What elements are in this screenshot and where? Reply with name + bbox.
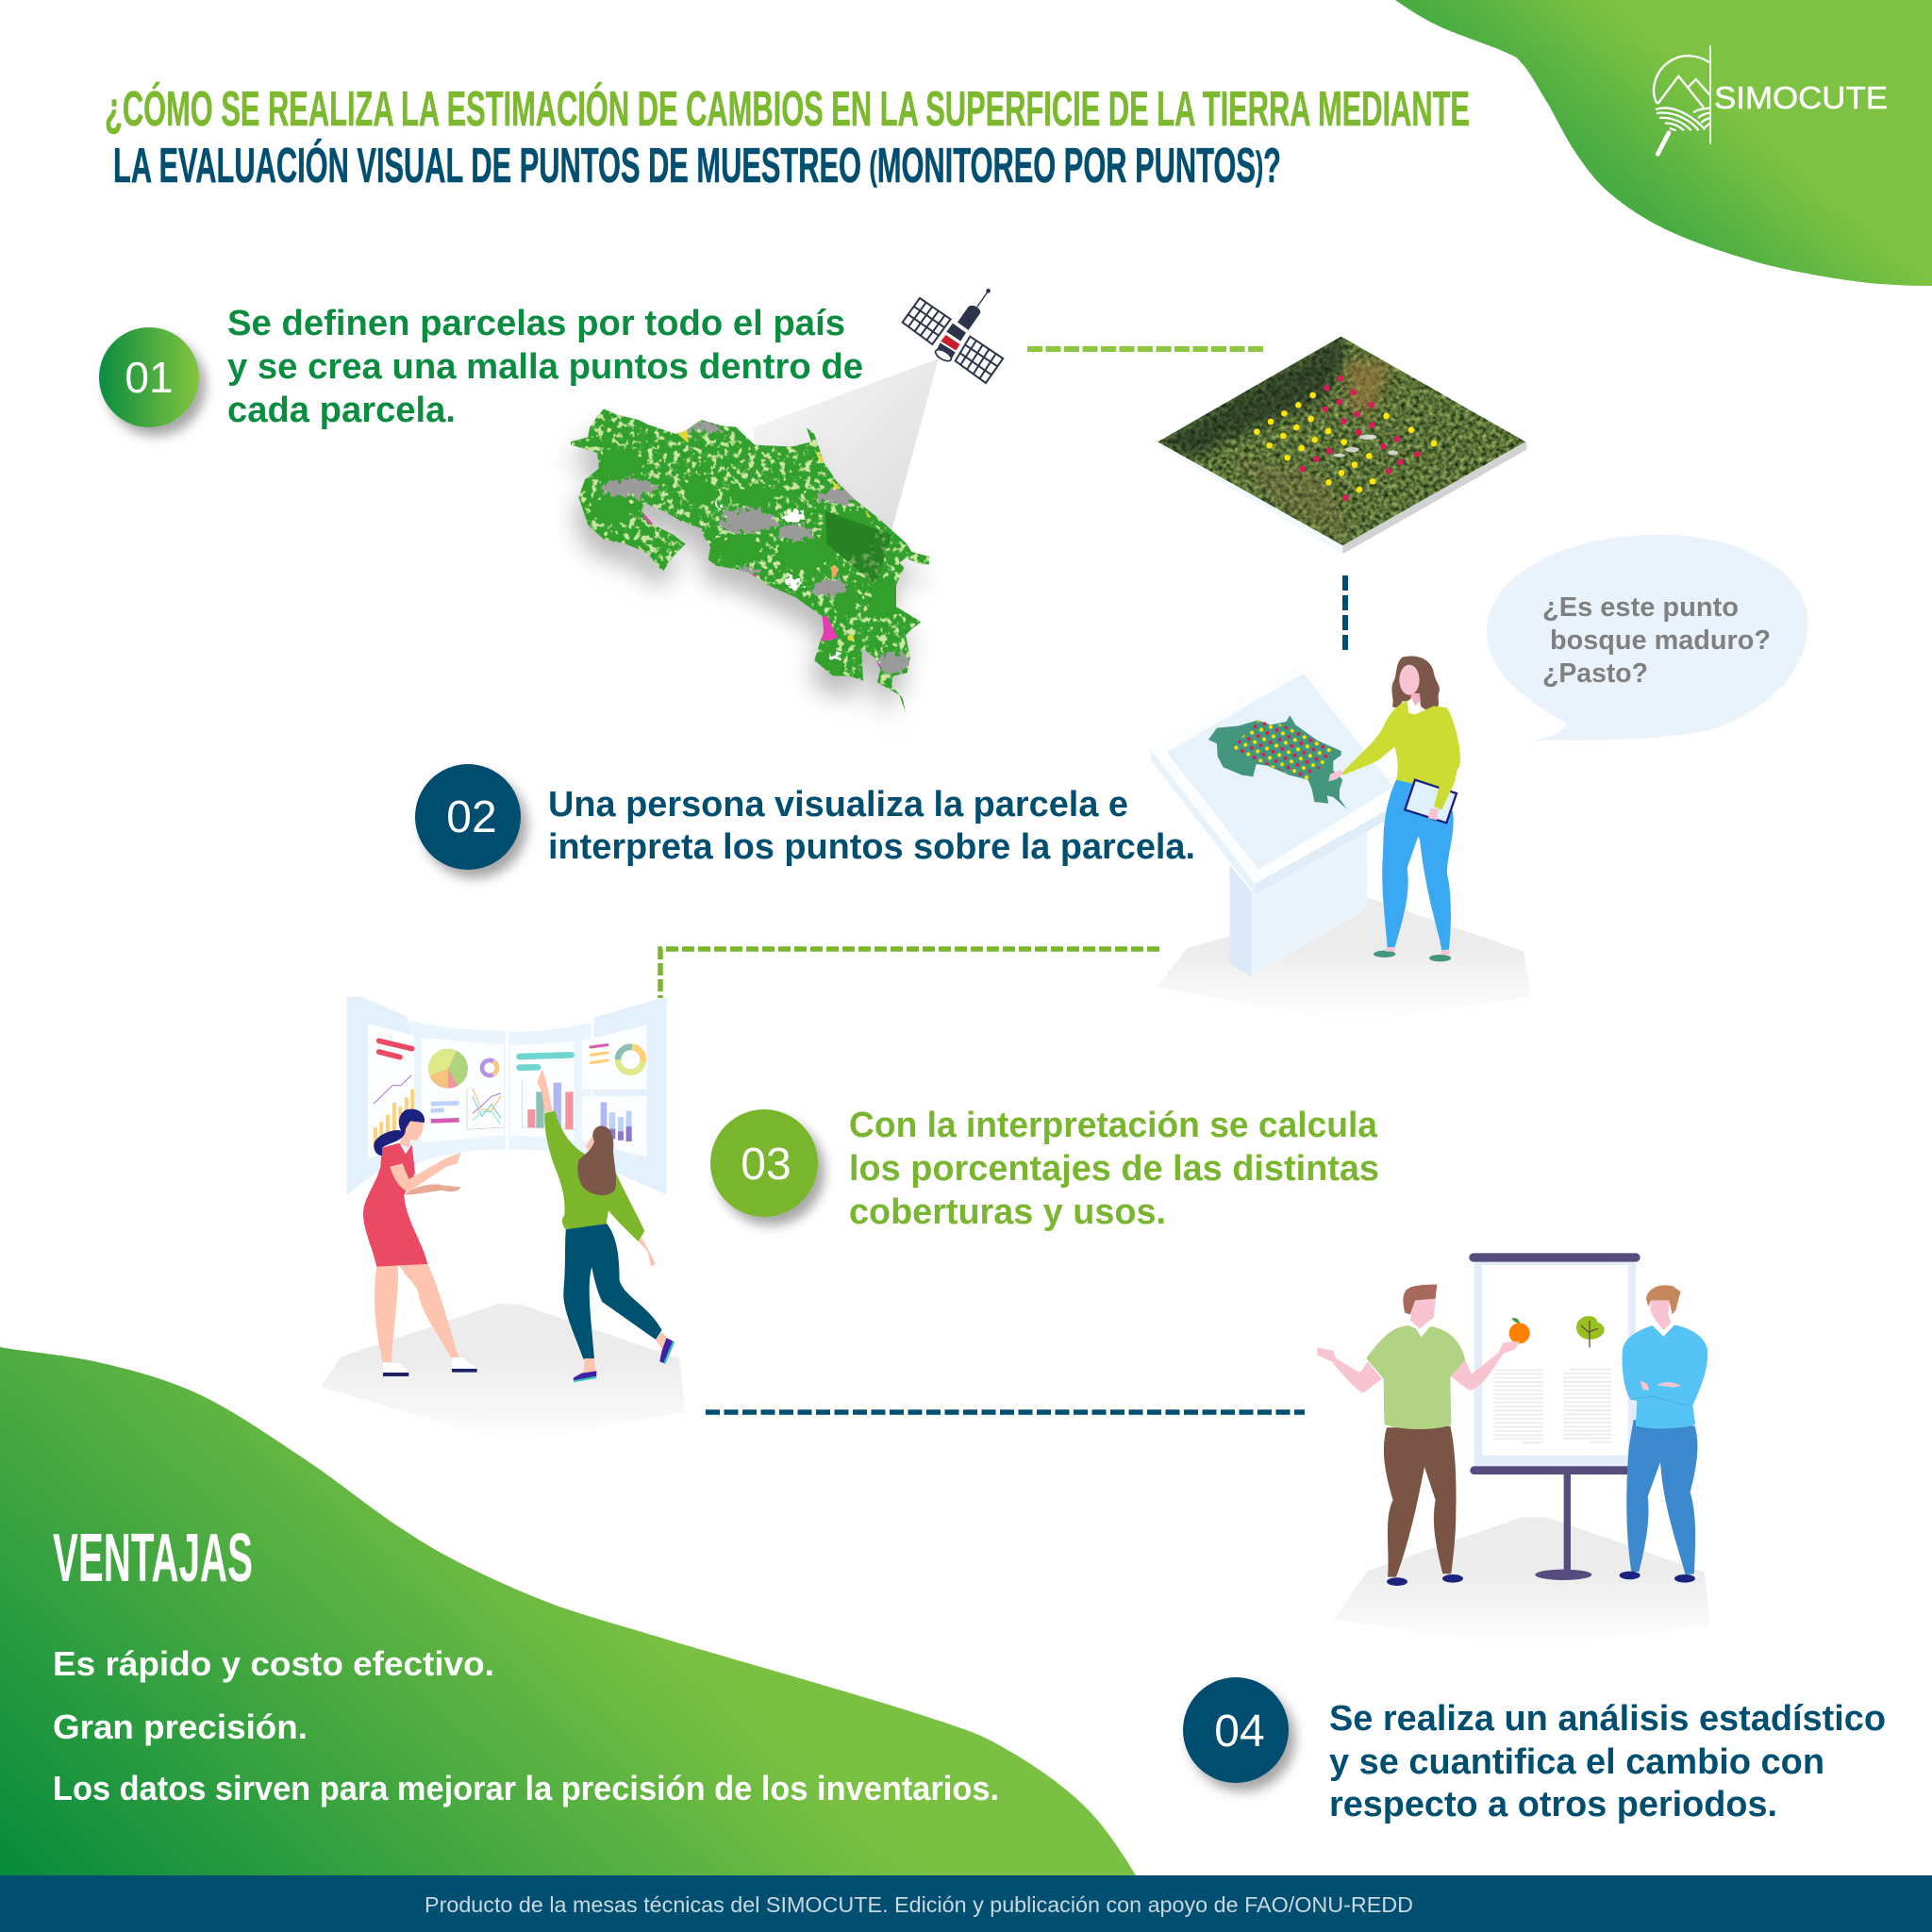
- step 04 badge: 04: [1214, 1707, 1265, 1757]
- step 01 text: Se definen parcelas por todo el país: [227, 304, 845, 343]
- step 03 badge: 03: [741, 1140, 791, 1190]
- advantages list: Es rápido y costo efectivo.: [53, 1644, 494, 1683]
- step 02 text: [548, 785, 1195, 867]
- speech bubble: bosque maduro?: [1550, 625, 1771, 656]
- heading: VENTAJAS: VENTAJAS: [53, 1521, 253, 1596]
- dashed connector 1: [1027, 346, 1264, 352]
- step 02 badge: 02: [446, 792, 497, 842]
- step 03 badge: [710, 1109, 818, 1217]
- step 01 text: [227, 304, 863, 430]
- step 03 text: coberturas y usos.: [849, 1192, 1166, 1232]
- footer bar: [0, 1875, 1932, 1932]
- speech bubble: ¿Pasto?: [1542, 658, 1648, 689]
- step 02 text: interpreta los puntos sobre la parcela.: [548, 827, 1195, 867]
- title: LA EVALUACIÓN VISUAL DE PUNTOS DE MUESTREO: [113, 139, 1376, 193]
- top right green shape: [1395, 0, 1932, 286]
- title: ): [1256, 143, 1263, 188]
- step 04 badge: [1183, 1677, 1289, 1783]
- title: (: [870, 143, 877, 188]
- advantages list: [53, 1644, 999, 1807]
- illustration: two women at dashboards: [321, 997, 686, 1443]
- step 04 text: y se cuantifica el cambio con: [1329, 1742, 1824, 1782]
- speech bubble: ¿Es este punto: [1542, 592, 1739, 623]
- bottom left green shape: [0, 1347, 1136, 1875]
- step 02 badge: [415, 764, 521, 870]
- step 04 text: respecto a otros periodos.: [1329, 1785, 1777, 1824]
- icon: satellite: [903, 290, 1003, 383]
- map of Costa Rica: [566, 406, 934, 731]
- title: MONITOREO POR PUNTOS: [877, 139, 1256, 193]
- dashed connector 3: [660, 949, 1159, 998]
- logo: SIMOCUTE: SIMOCUTE: [1714, 80, 1888, 115]
- logo: SIMOCUTE: [1654, 45, 1888, 154]
- illustration: two men with 2018-2020 board: [1317, 1253, 1710, 1648]
- step 03 text: Con la interpretación se calcula: [849, 1106, 1378, 1145]
- satellite parcel with sampling points: [1158, 336, 1528, 554]
- beam from satellite: [754, 358, 939, 531]
- advantages list: Gran precisión.: [53, 1707, 308, 1746]
- dashed connector 4: [706, 1409, 1305, 1415]
- speech bubble: [1487, 535, 1808, 741]
- step 03 text: los porcentajes de las distintas: [849, 1149, 1379, 1189]
- step 01 text: cada parcela.: [227, 391, 456, 430]
- step 04 text: Se realiza un análisis estadístico: [1329, 1699, 1886, 1739]
- advantages list: Los datos sirven para mejorar la precisión de los inventarios.: [53, 1769, 999, 1807]
- step 02 text: Una persona visualiza la parcela e: [548, 785, 1128, 824]
- footer bar: Producto de la mesas técnicas del SIMOCUTE. Edición y publicación con apoyo de FAO/ONU-REDD: [425, 1892, 1413, 1917]
- step 01 badge: [99, 327, 199, 427]
- title: ?: [1263, 139, 1281, 193]
- dashed connector 2: [1342, 575, 1348, 651]
- step 01 text: y se crea una malla puntos dentro de: [227, 347, 863, 387]
- step 04 text: [1329, 1699, 1886, 1824]
- step 03 text: [849, 1106, 1379, 1232]
- step 01 badge: 01: [125, 353, 174, 402]
- title: [105, 82, 1470, 193]
- illustration: woman at map kiosk: [1151, 657, 1531, 1022]
